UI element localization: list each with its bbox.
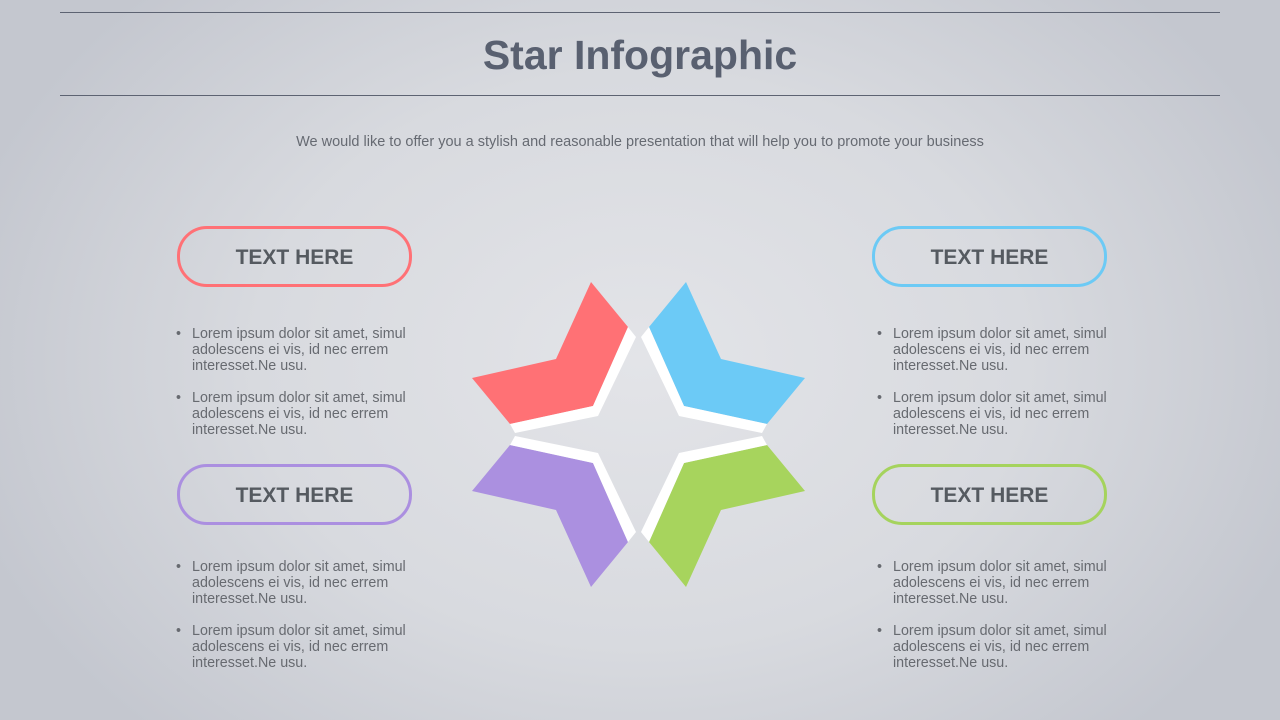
pill: green label: TEXT HERE <box>931 484 1048 507</box>
pill: purple label <box>177 464 412 525</box>
subtitle: We would like to offer you a stylish and reasonable presentation that will help you to promote your business <box>296 134 984 150</box>
star piece: red <box>472 282 636 433</box>
text block: purple: Lorem ipsum dolor sit amet, simul adolescens ei vis, id nec errem interesset.Ne usu. <box>192 559 406 607</box>
text block: purple <box>176 559 406 671</box>
star piece: blue <box>641 282 805 433</box>
text block: green: Lorem ipsum dolor sit amet, simul adolescens ei vis, id nec errem interesset.Ne usu. <box>893 623 1107 671</box>
text block: red: Lorem ipsum dolor sit amet, simul adolescens ei vis, id nec errem interesset.Ne usu. <box>192 390 406 438</box>
text block: blue <box>878 326 1107 438</box>
pill: blue label <box>872 226 1107 287</box>
title: Star Infographic <box>483 32 797 78</box>
text block: blue: Lorem ipsum dolor sit amet, simul adolescens ei vis, id nec errem interesset.Ne usu. <box>893 390 1107 438</box>
text block: green: Lorem ipsum dolor sit amet, simul adolescens ei vis, id nec errem interesset.Ne usu. <box>893 559 1107 607</box>
text block: red: Lorem ipsum dolor sit amet, simul adolescens ei vis, id nec errem interesset.Ne usu. <box>192 326 406 374</box>
pill: blue label: TEXT HERE <box>931 246 1048 269</box>
text block: blue: Lorem ipsum dolor sit amet, simul adolescens ei vis, id nec errem interesset.Ne usu. <box>893 326 1107 374</box>
star piece: green <box>641 436 805 587</box>
pill: green label <box>872 464 1107 525</box>
pill: purple label: TEXT HERE <box>236 484 353 507</box>
text block: green <box>878 559 1107 671</box>
text block: red <box>176 326 406 438</box>
star piece: purple <box>472 436 636 587</box>
pill: red label: TEXT HERE <box>236 246 353 269</box>
pill: red label <box>177 226 412 287</box>
text block: purple: Lorem ipsum dolor sit amet, simul adolescens ei vis, id nec errem interesset.Ne usu. <box>192 623 406 671</box>
